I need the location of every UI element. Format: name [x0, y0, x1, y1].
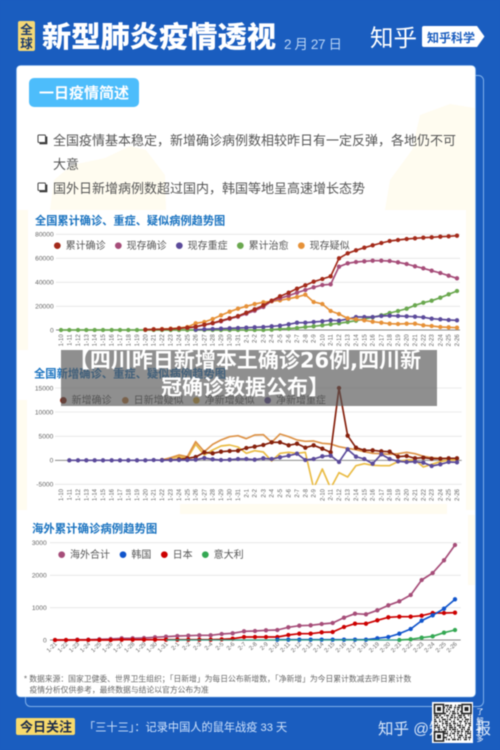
bullet text block: 国外日新增病例数超过国内，韩国等地呈高速增长态势 — [53, 181, 365, 196]
legend: chart 3: 意大利 — [214, 548, 244, 561]
series: overseas total — [55, 545, 455, 640]
line chart 2: daily additions: 1-12 — [76, 488, 82, 501]
line chart 2: daily additions: 1-11 — [67, 488, 73, 501]
line chart 1: cumulative trends: 2-6 — [287, 334, 293, 343]
line chart 3: overseas: 1-30 — [146, 641, 159, 654]
line chart 1: cumulative trends: 1-11 — [67, 334, 73, 346]
brand tag: zhihu science — [422, 26, 484, 47]
line chart 2: daily additions: 2-10 — [320, 488, 326, 501]
line chart 2: daily additions: 1-23 — [169, 488, 175, 501]
line chart 3: overseas: 1-29 — [135, 641, 148, 654]
line chart 1: cumulative trends: 2-21 — [413, 334, 419, 346]
line chart 1: cumulative trends: 2-1 — [244, 334, 250, 343]
series: net new suspected — [162, 444, 457, 488]
line chart 2: daily additions: 2-23 — [430, 488, 436, 501]
line chart 3: overseas: 2-23 — [413, 641, 426, 654]
heading: chart 1: 全国累计确诊、重症、疑似病例趋势图 — [35, 214, 225, 228]
line chart 3: overseas: 1-24 — [79, 641, 93, 654]
line chart 2: daily additions: 2-14 — [354, 488, 360, 501]
line chart 2: daily additions: 2-19 — [396, 488, 402, 501]
legend: chart 1: 累计确诊 — [66, 239, 106, 252]
line chart 1: cumulative trends: 2-18 — [388, 334, 394, 346]
line chart 1: cumulative trends: 1-16 — [110, 334, 116, 346]
line chart 3: overseas: 2-24 — [424, 641, 437, 654]
line chart 2: daily additions: 1-14 — [93, 488, 99, 501]
legend: chart 2 — [60, 394, 326, 407]
brand tag: zhihu science: 知乎科学 — [427, 30, 475, 45]
footnote — [24, 674, 411, 694]
line chart 1: cumulative trends: 1-15 — [101, 334, 107, 346]
line chart 1: cumulative trends: 1-13 — [84, 334, 90, 346]
line chart 2: daily additions: 2-6 — [287, 488, 293, 498]
line chart 1: cumulative trends: 1-20 — [143, 334, 149, 346]
line chart 3: overseas: 2-17 — [346, 641, 359, 654]
line chart 2: daily additions: 1-31 — [236, 488, 242, 501]
line chart 1: cumulative trends: 2-9 — [312, 334, 318, 343]
line chart 3: overseas: 3000 — [32, 540, 47, 547]
line chart 3: overseas: 2-22 — [402, 641, 415, 654]
line chart 2: daily additions: 2-12 — [337, 488, 343, 501]
line chart 1: cumulative trends: 2-13 — [346, 334, 352, 346]
line chart 1: cumulative trends: 1-26 — [194, 334, 200, 346]
line chart 3: overseas: 2-16 — [335, 641, 348, 654]
series: healed — [61, 291, 457, 330]
series: new confirmed — [162, 388, 457, 460]
line chart 2: daily additions: 15000 — [35, 385, 54, 392]
legend: chart 1: 现存重症 — [188, 239, 228, 252]
line chart 3: overseas: 2-11 — [280, 641, 293, 654]
line chart 1: cumulative trends — [35, 232, 461, 346]
line chart 1: cumulative trends: 1-21 — [152, 334, 158, 346]
line chart 2: daily additions: 2-22 — [421, 488, 427, 501]
legend: chart 1: 现存确诊 — [127, 239, 167, 252]
line chart 3: overseas: 2-7 — [237, 641, 248, 652]
header: badge: 全 — [20, 22, 33, 37]
series: cumulative confirmed — [145, 236, 457, 330]
today tag: 今日关注 — [20, 720, 72, 734]
main white card — [16, 66, 476, 697]
section pill — [29, 78, 139, 107]
line chart 1: cumulative trends: 2-14 — [354, 334, 360, 346]
line chart 3: overseas: 1-26 — [102, 641, 115, 654]
line chart 1: cumulative trends: 60000 — [35, 256, 54, 263]
series: existing confirmed — [187, 261, 457, 328]
bullet text block — [38, 133, 456, 196]
line chart 3: overseas: 2-3 — [193, 641, 204, 652]
line chart 2: daily additions: 1-18 — [126, 488, 132, 501]
line chart 1: cumulative trends: 2-4 — [270, 334, 276, 343]
series: net new severe — [69, 449, 457, 466]
line chart 2: daily additions: 2-8 — [303, 488, 309, 498]
header: badge — [18, 21, 35, 51]
qr code — [432, 702, 473, 743]
legend: chart 2: 日新增疑似 — [134, 394, 184, 407]
section pill: 一日疫情简述 — [39, 84, 129, 102]
pale map background — [17, 104, 475, 585]
legend: chart 3: 海外合计 — [70, 548, 110, 561]
title: 新型肺炎疫情透视 — [42, 21, 276, 54]
line chart 2: daily additions: 2-17 — [379, 488, 385, 501]
line chart 1: cumulative trends: 2-16 — [371, 334, 377, 346]
line chart 3: overseas: 1-27 — [113, 641, 126, 654]
line chart 2: daily additions: 2-15 — [362, 488, 368, 501]
back card outline — [26, 76, 484, 706]
heading: chart 3: 海外累计确诊病例趋势图 — [32, 522, 157, 536]
line chart 1: cumulative trends: 2-23 — [430, 334, 436, 346]
overlay banner: 【四川昨日新增本土确诊26例,四川新 — [69, 348, 421, 372]
line chart 2: daily additions: 1-25 — [185, 488, 191, 501]
line chart 1: cumulative trends: 2-26 — [455, 334, 461, 346]
line chart 2: daily additions: 10000 — [35, 409, 54, 416]
line chart 3: overseas: 2-12 — [290, 641, 304, 654]
line chart 1: cumulative trends: 2-3 — [261, 334, 267, 343]
line chart 1: cumulative trends: 1-29 — [219, 334, 225, 346]
line chart 2: daily additions: 2-18 — [388, 488, 394, 501]
line chart 2: daily additions: 2-16 — [371, 488, 377, 501]
line chart 1: cumulative trends: 1-31 — [236, 334, 242, 346]
line chart 1: cumulative trends: 2-12 — [337, 334, 343, 346]
line chart 3: overseas: 1000 — [32, 605, 47, 612]
line chart 2: daily additions: 2-9 — [312, 488, 318, 498]
line chart 2: daily additions: 0 — [50, 458, 54, 465]
line chart 2: daily additions: 1-29 — [219, 488, 225, 501]
line chart 3: overseas: 2-13 — [302, 641, 315, 654]
line chart 3: overseas: 2-1 — [171, 641, 182, 652]
series: italy — [399, 630, 455, 640]
line chart 3: overseas: 2-8 — [248, 641, 259, 652]
line chart 1: cumulative trends: 1-27 — [202, 334, 208, 346]
line chart 2: daily additions: 2-3 — [261, 488, 267, 498]
series: daily new suspected — [162, 434, 457, 460]
line chart 3: overseas: 2-6 — [226, 641, 237, 652]
line chart 2: daily additions: 1-22 — [160, 488, 166, 501]
qr side text: 解 — [476, 716, 484, 725]
line chart 1: cumulative trends: 2-24 — [438, 334, 444, 346]
line chart 2: daily additions: 2-4 — [270, 488, 276, 498]
line chart 1: cumulative trends: 1-22 — [160, 334, 166, 346]
line chart 2: daily additions: -5000 — [36, 482, 54, 489]
line chart 3: overseas: 1-22 — [57, 641, 70, 654]
line chart 2: daily additions: 1-30 — [228, 488, 234, 501]
legend: chart 3: 韩国 — [131, 548, 151, 561]
line chart 3: overseas: 1-23 — [68, 641, 82, 654]
line chart 1: cumulative trends: 80000 — [35, 232, 54, 239]
line chart 2: daily additions: 1-26 — [194, 488, 200, 501]
line chart 2: daily additions: 2-21 — [413, 488, 419, 501]
legend: chart 2: 净新增疑似 — [205, 394, 255, 407]
line chart 3: overseas: 2-4 — [204, 641, 215, 652]
line chart 3: overseas: 2-2 — [182, 641, 193, 652]
line chart 1: cumulative trends: 1-25 — [185, 334, 191, 346]
line chart 2: daily additions: 2-25 — [447, 488, 453, 501]
legend: chart 1: 现存疑似 — [310, 239, 350, 252]
line chart 2: daily additions: 5000 — [39, 434, 54, 441]
line chart 2: daily additions: 1-10 — [59, 488, 65, 501]
line chart 1: cumulative trends: 2-19 — [396, 334, 402, 346]
qr side text: 了 — [476, 708, 484, 716]
line chart 3: overseas: 2000 — [32, 573, 47, 580]
qr side text: 多 — [476, 734, 484, 743]
line chart 3: overseas: 2-14 — [313, 641, 326, 654]
line chart 1: cumulative trends: 1-19 — [135, 334, 141, 346]
line chart 1: cumulative trends: 2-2 — [253, 334, 259, 343]
line chart 1: cumulative trends: 2-11 — [329, 334, 335, 346]
line chart 1: cumulative trends: 0 — [50, 327, 54, 334]
line chart 1: cumulative trends: 2-17 — [379, 334, 385, 346]
line chart 3: overseas: 1-25 — [90, 641, 104, 654]
line chart 3: overseas: 0 — [43, 637, 47, 644]
line chart 2: daily additions: 1-17 — [118, 488, 124, 501]
line chart 1: cumulative trends: 1-10 — [59, 334, 65, 346]
line chart 1: cumulative trends: 1-23 — [169, 334, 175, 346]
line chart 1: cumulative trends: 2-10 — [320, 334, 326, 346]
legend: chart 1: 累计治愈 — [249, 239, 289, 252]
line chart 1: cumulative trends: 1-18 — [126, 334, 132, 346]
legend: chart 2: 净新增重症 — [276, 394, 326, 407]
line chart 1: cumulative trends: 2-7 — [295, 334, 301, 343]
watermark: 知乎 @知识日报 — [378, 720, 491, 738]
line chart 3: overseas: 2-5 — [215, 641, 226, 652]
overlay banner: 冠确诊数据公布】 — [161, 376, 329, 400]
line chart 2: daily additions: 2-5 — [278, 488, 284, 498]
line chart 2: daily additions: 2-20 — [405, 488, 411, 501]
line chart 2: daily additions: 2-2 — [253, 488, 259, 498]
line chart 1: cumulative trends: 1-24 — [177, 334, 183, 346]
line chart 2: daily additions: 2-26 — [455, 488, 461, 501]
line chart 1: cumulative trends: 1-12 — [76, 334, 82, 346]
today text: 「三十三」：记录中国人的鼠年战疫 33 天 — [84, 720, 287, 734]
line chart 3: overseas: 2-21 — [390, 641, 404, 654]
series: suspected — [145, 295, 457, 330]
line chart 3: overseas: 2-19 — [368, 641, 382, 654]
brand: zhihu: 知乎 — [370, 25, 417, 51]
line chart 1: cumulative trends: 2-25 — [447, 334, 453, 346]
overlay banner — [61, 348, 437, 406]
qr side text — [476, 708, 484, 743]
legend: chart 3 — [58, 548, 244, 561]
line chart 1: cumulative trends: 2-22 — [421, 334, 427, 346]
line chart 3: overseas: 2-20 — [379, 641, 393, 654]
line chart 1: cumulative trends: 40000 — [35, 280, 54, 287]
line chart 2: daily additions: 1-28 — [211, 488, 217, 501]
line chart 1: cumulative trends: 2-15 — [362, 334, 368, 346]
bullet text block: 大意 — [53, 157, 79, 172]
line chart 2: daily additions — [35, 385, 462, 501]
line chart 2: daily additions: 1-20 — [143, 488, 149, 501]
line chart 2: daily additions: 1-27 — [202, 488, 208, 501]
header: badge: 球 — [20, 36, 33, 51]
series: japan — [55, 613, 455, 640]
line chart 2: daily additions: 1-13 — [84, 488, 90, 501]
line chart 2: daily additions: 1-24 — [177, 488, 183, 501]
heading: chart 2: 全国新增确诊、重症、疑似病例趋势图 — [34, 366, 226, 380]
footnote: * 数据来源：国家卫健委、世界卫生组织；「日新增」为每日公布新增数，「净新增」为今日累计数减去昨日累计数 — [24, 674, 411, 684]
line chart 3: overseas: 1-21 — [46, 641, 59, 654]
line chart 1: cumulative trends: 1-17 — [118, 334, 124, 346]
date: 2 月 27 日 — [284, 37, 342, 52]
line chart 3: overseas: 2-18 — [357, 641, 370, 654]
line chart 1: cumulative trends: 1-14 — [93, 334, 99, 346]
legend: chart 3: 日本 — [173, 548, 193, 561]
line chart 2: daily additions: 1-21 — [152, 488, 158, 501]
legend: chart 2: 新增确诊 — [72, 394, 112, 407]
line chart 1: cumulative trends: 2-8 — [303, 334, 309, 343]
line chart 1: cumulative trends: 20000 — [35, 304, 54, 311]
qr side text: 更 — [476, 726, 484, 734]
line chart 1: cumulative trends: 1-30 — [228, 334, 234, 346]
line chart 1: cumulative trends: 1-28 — [211, 334, 217, 346]
line chart 2: daily additions: 2-24 — [438, 488, 444, 501]
line chart 3: overseas: 2-10 — [268, 641, 282, 654]
line chart 3: overseas: 1-31 — [157, 641, 170, 654]
line chart 3: overseas — [32, 540, 461, 654]
line chart 2: daily additions: 2-1 — [244, 488, 250, 498]
line chart 1: cumulative trends: 2-5 — [278, 334, 284, 343]
footnote: 疫情分析仅供参考，最终数据与结论以官方公布为准 — [30, 684, 209, 694]
legend: chart 1 — [54, 239, 350, 252]
series: severe — [196, 316, 457, 330]
line chart 2: daily additions: 2-7 — [295, 488, 301, 498]
line chart 2: daily additions: 1-16 — [110, 488, 116, 501]
line chart 3: overseas: 2-26 — [446, 641, 459, 654]
line chart 2: daily additions: 2-13 — [346, 488, 352, 501]
line chart 3: overseas: 2-9 — [259, 641, 270, 652]
line chart 2: daily additions: 1-15 — [101, 488, 107, 501]
bullet text block: 全国疫情基本稳定，新增确诊病例数相较昨日有一定反弹，各地仍不可 — [53, 133, 456, 148]
line chart 2: daily additions: 1-19 — [135, 488, 141, 501]
series: korea — [277, 599, 455, 640]
line chart 2: daily additions: 2-11 — [329, 488, 335, 501]
line chart 3: overseas: 1-28 — [124, 641, 137, 654]
line chart 3: overseas: 2-15 — [324, 641, 337, 654]
line chart 1: cumulative trends: 2-20 — [405, 334, 411, 346]
line chart 3: overseas: 2-25 — [435, 641, 448, 654]
